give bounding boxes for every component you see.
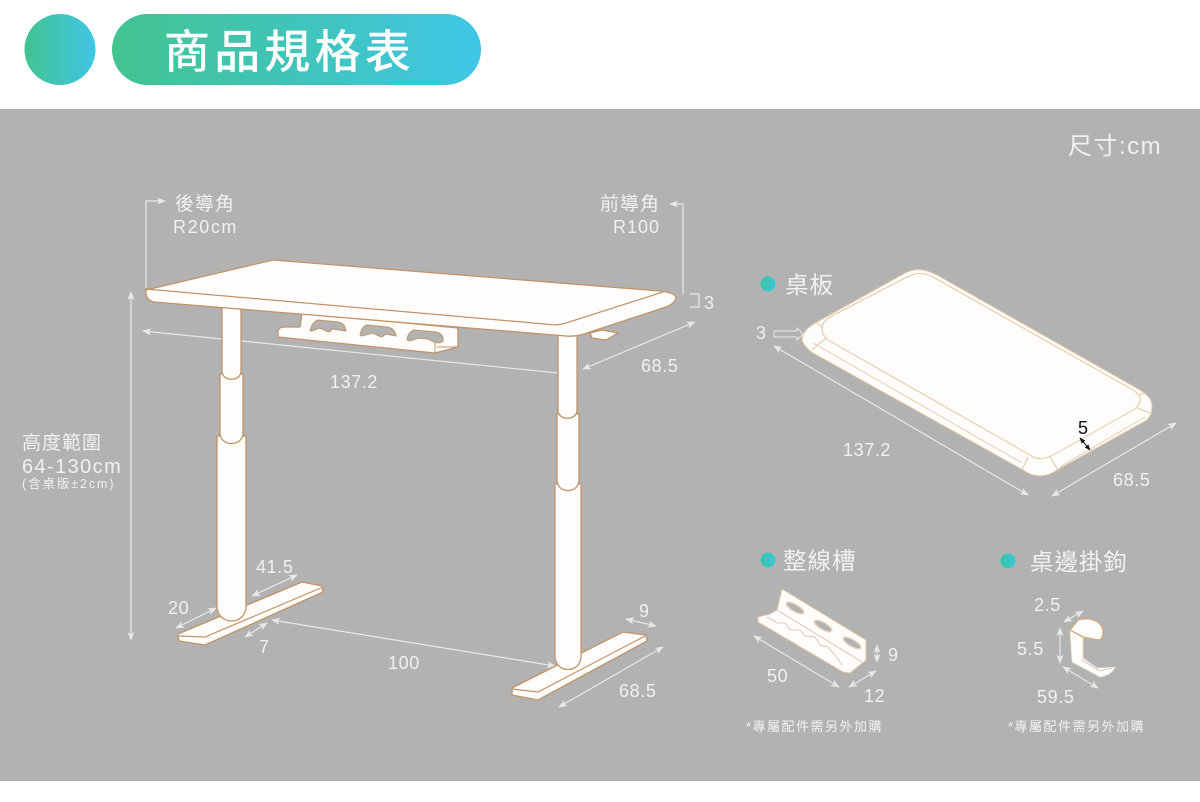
left base foot (178, 582, 323, 645)
dimension: foot length 68.5 (559, 647, 663, 707)
dimension: 9: 9 (639, 601, 650, 621)
footnote: *專屬配件需另外加購 (746, 719, 883, 734)
dimension: 41.5 (252, 557, 297, 596)
dimension: 2.5: 2.5 (1034, 595, 1061, 615)
board outline (802, 270, 1152, 476)
dimension: 20 (168, 598, 216, 628)
arrow: board width (1052, 423, 1176, 496)
title pill (112, 14, 481, 85)
heading: 桌板 (785, 272, 834, 298)
label: board length: 137.2 (843, 440, 891, 460)
bullet (1000, 554, 1016, 568)
dimension: depth 68.5: 68.5 (641, 356, 678, 376)
panel: hook (1000, 549, 1145, 734)
dimension: 100: 100 (388, 653, 420, 673)
arrow: desk width 137.2 (143, 331, 558, 373)
dimension: foot length 68.5: 68.5 (619, 681, 656, 701)
dimension: 59.5: 59.5 (1037, 687, 1074, 707)
right leg (555, 335, 581, 670)
dimension: 5.5 (1017, 628, 1060, 663)
height range label (22, 432, 122, 491)
dimension: 12: 12 (864, 686, 885, 706)
arrow: board length (774, 346, 1028, 495)
dimension: 9 (877, 645, 899, 665)
tray illustration (758, 589, 866, 673)
edge line (813, 343, 1145, 467)
desk illustration (131, 193, 715, 707)
dimension: 20: 20 (168, 598, 189, 618)
bullet (760, 552, 776, 568)
dimension: 59.5 (1037, 667, 1098, 707)
dimension: 137.2: 137.2 (330, 372, 378, 392)
height range label: 64-130cm (22, 456, 122, 478)
label: board width: 68.5 (1113, 470, 1150, 490)
header dot (24, 14, 96, 85)
board corner seams (812, 323, 1150, 472)
dimension: 7 (245, 623, 270, 657)
label: front corner: R100 (613, 217, 660, 237)
label: rear corner: 後導角 (175, 193, 235, 215)
panel: desktop board (756, 270, 1176, 496)
arrow: bevel 5 (1080, 438, 1090, 450)
arrow: rear corner (146, 201, 165, 288)
dimension: 50 (754, 636, 839, 687)
label: front corner: 前導角 (600, 193, 660, 215)
arrow: height range (130, 292, 132, 640)
heading: 整線槽 (783, 548, 856, 574)
cable tray under desk (278, 313, 458, 353)
height range label: 高度範圍 (22, 432, 102, 454)
dimension: 12 (849, 671, 885, 706)
panel: cable tray (746, 548, 899, 734)
dimension: thickness 3: 3 (704, 293, 715, 313)
left leg (217, 305, 246, 621)
board inner surface (822, 274, 1140, 459)
dimension: 7: 7 (259, 637, 270, 657)
dimension: 41.5: 41.5 (256, 557, 293, 577)
header (24, 14, 481, 85)
dimension: 9: 9 (888, 645, 899, 665)
bullet (760, 276, 776, 292)
height range label: (含桌版±2cm) (22, 476, 115, 491)
desktop (146, 260, 676, 336)
dimension: 9 (626, 601, 656, 626)
title: 商品規格表 (164, 26, 415, 78)
arrow: distance 100 (272, 620, 555, 666)
label: bevel 5: 5 (1078, 418, 1089, 438)
right base foot (512, 632, 647, 700)
hook illustration (1070, 619, 1115, 677)
dimension: 2.5 (1034, 595, 1083, 622)
label: rear corner: R20cm (173, 217, 238, 237)
heading: 桌邊掛鉤 (1030, 549, 1128, 575)
label: rear corner (173, 193, 238, 237)
unit label: 尺寸:cm (1068, 133, 1162, 160)
footnote: *專屬配件需另外加購 (1008, 719, 1145, 734)
arrow: board thickness 3 (774, 328, 803, 340)
label: front corner (600, 193, 660, 237)
arrow: front corner (670, 204, 683, 295)
control paddle (590, 330, 618, 340)
dimension: depth 68.5 (583, 322, 695, 376)
dimension: thickness 3 (690, 293, 715, 313)
dimension: 5.5: 5.5 (1017, 639, 1044, 659)
dimension: 50: 50 (767, 666, 788, 686)
label: thickness 3: 3 (756, 323, 767, 343)
